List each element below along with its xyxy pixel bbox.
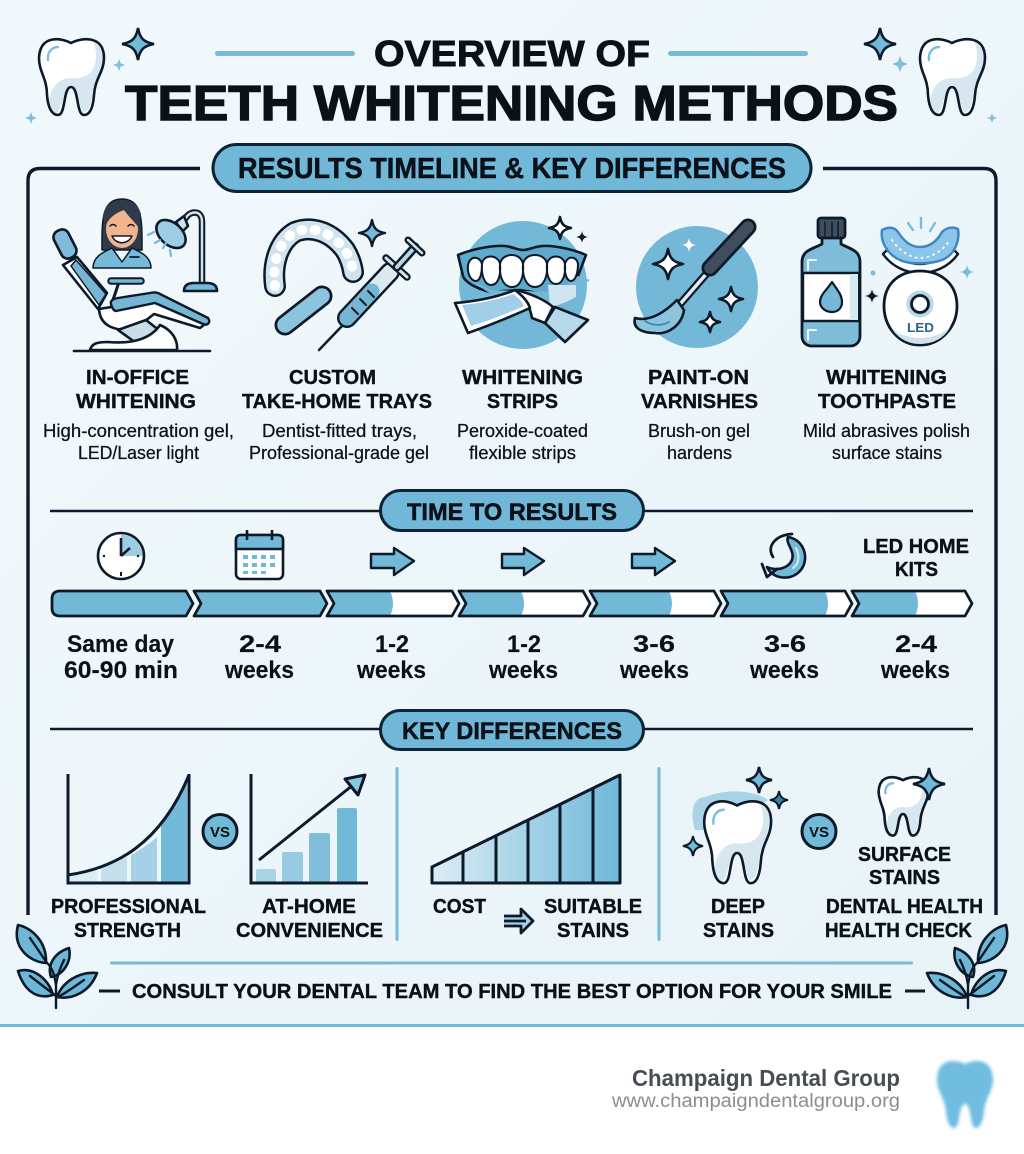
labels: stain types: STAINS bbox=[869, 866, 940, 889]
vs badge bbox=[203, 814, 237, 848]
timeline labels: 2-4 bbox=[895, 631, 938, 658]
labels: cost to suitable stains bbox=[433, 895, 642, 942]
timeline labels: Same day bbox=[67, 631, 175, 658]
label: whitening strips: STRIPS bbox=[487, 390, 558, 413]
icon: arrow 3 bbox=[632, 548, 675, 575]
progress chevrons bbox=[52, 591, 972, 616]
icon: surface stain tooth bbox=[879, 768, 945, 836]
icon: mouthwash bottle and LED kit bbox=[802, 218, 974, 346]
label: whitening toothpaste: WHITENING bbox=[826, 366, 947, 389]
labels: professional strength and at-home convenience: STRENGTH bbox=[74, 919, 181, 942]
vs badge bbox=[802, 814, 836, 848]
label: custom take-home trays: CUSTOM bbox=[289, 366, 376, 389]
timeline labels: weeks bbox=[356, 657, 426, 684]
vs badge: VS bbox=[210, 824, 230, 841]
label: paint-on varnishes: VARNISHES bbox=[641, 390, 758, 413]
header bbox=[25, 28, 997, 131]
label: paint-on varnishes: Brush-on gel bbox=[648, 421, 750, 441]
label: custom take-home trays: TAKE-HOME TRAYS bbox=[242, 390, 432, 413]
label: whitening strips: flexible strips bbox=[469, 443, 576, 463]
labels: professional strength and at-home convenience: AT-HOME bbox=[262, 895, 356, 918]
icon: calendar bbox=[236, 530, 283, 579]
labels: stain types bbox=[703, 843, 983, 942]
chart: at-home convenience bars bbox=[251, 774, 368, 883]
label: paint-on varnishes: hardens bbox=[667, 443, 732, 463]
timeline labels: weeks bbox=[619, 657, 689, 684]
title: TEETH WHITENING METHODS bbox=[125, 77, 898, 131]
label: whitening strips: WHITENING bbox=[462, 366, 583, 389]
icon: left sparkles bbox=[25, 28, 154, 124]
footer brand text bbox=[611, 1065, 900, 1112]
label: led home kits: LED HOME bbox=[863, 535, 969, 558]
icon: arrow 2 bbox=[502, 548, 544, 575]
timeline labels: 2-4 bbox=[239, 631, 282, 658]
label: custom take-home trays bbox=[242, 366, 432, 463]
timeline labels: weeks bbox=[749, 657, 819, 684]
label: custom take-home trays: Professional-grade gel bbox=[249, 443, 429, 463]
logo: blue tooth bbox=[937, 1061, 993, 1128]
closing accent line bbox=[110, 962, 913, 964]
labels: cost to suitable stains: STAINS bbox=[557, 919, 629, 942]
label: led home kits bbox=[863, 535, 969, 581]
timeline labels: 1-2 bbox=[375, 631, 409, 658]
label: in-office whitening: LED/Laser light bbox=[78, 443, 199, 463]
label: whitening toothpaste: surface stains bbox=[832, 443, 942, 463]
labels: professional strength and at-home convenience: PROFESSIONAL bbox=[51, 895, 206, 918]
label: custom take-home trays: Dentist-fitted trays, bbox=[262, 421, 417, 441]
heading: time to results bbox=[380, 490, 644, 530]
label: in-office whitening: IN-OFFICE bbox=[86, 366, 189, 389]
label: paint-on varnishes: PAINT-ON bbox=[648, 366, 749, 389]
footer divider line bbox=[0, 1024, 1024, 1027]
label: in-office whitening bbox=[43, 366, 234, 463]
label: whitening toothpaste: TOOTHPASTE bbox=[818, 390, 956, 413]
title accent line right bbox=[668, 51, 808, 56]
labels: stain types: DEEP bbox=[711, 895, 765, 918]
heading: key differences bbox=[380, 710, 644, 750]
panel: whitening methods bbox=[43, 199, 974, 463]
chart: professional strength curve bbox=[68, 774, 189, 883]
timeline labels: 1-2 bbox=[507, 631, 541, 658]
icon: arrow 1 bbox=[371, 548, 414, 575]
icon: mouthwash bottle and LED kit: LED bbox=[907, 320, 934, 335]
heading: results timeline and key differences bbox=[213, 144, 811, 192]
timeline labels bbox=[64, 631, 950, 684]
timeline labels: 3-6 bbox=[633, 631, 675, 658]
heading: results timeline and key differences: RESULTS TIMELINE & KEY DIFFERENCES bbox=[238, 153, 786, 185]
section divider: key differences bbox=[50, 728, 973, 730]
icon: left tooth bbox=[39, 39, 104, 115]
title bbox=[125, 33, 898, 131]
heading: time to results: TIME TO RESULTS bbox=[407, 499, 617, 526]
labels: cost to suitable stains: COST bbox=[433, 895, 486, 918]
footer brand text: www.champaigndentalgroup.org bbox=[611, 1091, 900, 1112]
timeline labels: 60-90 min bbox=[64, 657, 178, 684]
timeline labels: 3-6 bbox=[764, 631, 806, 658]
icon: deep stain tooth bbox=[683, 767, 788, 883]
callout: consult your dental team: CONSULT YOUR DENTAL TEAM TO FIND THE BEST OPTION FOR YOUR SMILE bbox=[132, 980, 892, 1003]
label: in-office whitening: High-concentration gel, bbox=[43, 421, 234, 441]
heading: key differences: KEY DIFFERENCES bbox=[402, 718, 622, 745]
icon: right leaves bbox=[927, 925, 1007, 1008]
panel: timeline bbox=[52, 530, 972, 684]
label: whitening toothpaste bbox=[803, 366, 970, 463]
labels: stain types: SURFACE bbox=[858, 843, 951, 866]
column divider bbox=[658, 767, 660, 941]
icon: clock bbox=[98, 533, 144, 579]
label: whitening strips bbox=[457, 366, 588, 463]
title: OVERVIEW OF bbox=[374, 33, 650, 74]
timeline labels: weeks bbox=[488, 657, 558, 684]
label: whitening strips: Peroxide-coated bbox=[457, 421, 588, 441]
icon: custom tray and syringe bbox=[274, 220, 422, 350]
labels: stain types: HEALTH CHECK bbox=[825, 919, 972, 942]
column divider bbox=[396, 767, 398, 941]
footer brand text: Champaign Dental Group bbox=[632, 1065, 900, 1091]
section divider: time to results bbox=[50, 510, 973, 512]
label: whitening toothpaste: Mild abrasives polish bbox=[803, 421, 970, 441]
icon: swirl bbox=[762, 534, 805, 578]
icon: right sparkles bbox=[864, 28, 997, 123]
label: led home kits: KITS bbox=[895, 558, 938, 581]
labels: stain types: STAINS bbox=[703, 919, 774, 942]
chart: cost wedge bbox=[432, 775, 620, 883]
label: paint-on varnishes bbox=[641, 366, 758, 463]
title accent line left bbox=[215, 51, 355, 56]
icon: right tooth bbox=[920, 39, 985, 115]
labels: professional strength and at-home convenience: CONVENIENCE bbox=[236, 919, 383, 942]
vs badge: VS bbox=[809, 824, 829, 841]
icon: whitening strips on teeth bbox=[455, 217, 590, 349]
labels: stain types: DENTAL HEALTH bbox=[826, 895, 983, 918]
icon: varnish brush bbox=[635, 226, 758, 348]
timeline labels: weeks bbox=[880, 657, 950, 684]
label: in-office whitening: WHITENING bbox=[76, 390, 196, 413]
labels: professional strength and at-home convenience bbox=[51, 895, 383, 942]
panel: key differences bbox=[51, 767, 983, 942]
icon: left leaves bbox=[17, 925, 97, 1008]
main frame bbox=[28, 168, 996, 915]
arrow: cost to stains bbox=[504, 909, 533, 933]
timeline labels: weeks bbox=[224, 657, 294, 684]
labels: cost to suitable stains: SUITABLE bbox=[544, 895, 642, 918]
footer band bbox=[0, 1027, 1024, 1154]
icon: dental chair with dentist and lamp bbox=[51, 199, 217, 351]
